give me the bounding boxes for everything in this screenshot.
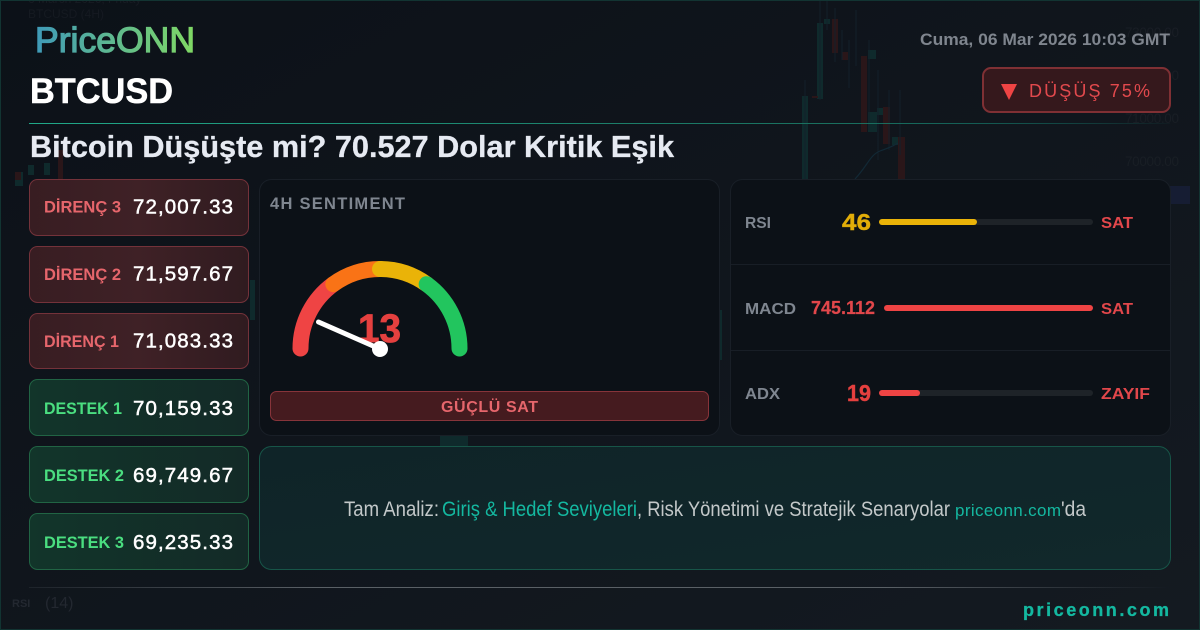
- call to action text: , Risk Yönetimi ve Stratejik Senaryolar: [637, 498, 950, 521]
- level: resistance 2: [30, 246, 248, 302]
- level: resistance 1: [30, 314, 248, 368]
- level: support 1: 70,159.33: [133, 397, 233, 420]
- indicator: ADX: ADX: [745, 386, 780, 403]
- trend badge: [983, 68, 1170, 112]
- panel: indicators: [730, 180, 1170, 436]
- symbol heading: BTCUSD: [30, 72, 173, 111]
- level: resistance 3: [30, 180, 248, 236]
- indicator: RSI: 46: [842, 209, 871, 235]
- date: Cuma, 06 Mar 2026 10:03 GMT: [920, 31, 1170, 49]
- level: resistance 2: 71,597.67: [133, 262, 233, 286]
- indicator: MACD: SAT: [1101, 301, 1133, 318]
- footer rule: [29, 587, 1170, 588]
- faded candlestick chart background: 72000.00: [1125, 68, 1179, 83]
- level: resistance 3: DİRENÇ 3: [44, 198, 121, 216]
- level: support 2: 69,749.67: [133, 464, 233, 487]
- level: support 1: DESTEK 1: [44, 400, 122, 418]
- call to action text: 'da: [1061, 498, 1086, 521]
- faded candlestick chart background: RSI: [12, 598, 30, 610]
- indicator: MACD: 745.112: [811, 298, 875, 318]
- indicator: MACD: MACD: [745, 301, 796, 318]
- gauge needle: [318, 322, 388, 357]
- faded candlestick chart background: 70000.00: [1125, 154, 1179, 169]
- level: support 3: DESTEK 3: [44, 534, 124, 552]
- call to action text: [344, 498, 1086, 521]
- call to action text: Tam Analiz:: [344, 498, 439, 521]
- verdict bar: [270, 392, 708, 420]
- logo: PriceONN: [35, 21, 195, 60]
- faded candlestick chart background: (14): [45, 595, 73, 612]
- call to action text: priceonn.com: [955, 501, 1061, 520]
- level: resistance 1: 71,083.33: [133, 330, 233, 352]
- icon: down triangle: [1001, 84, 1017, 100]
- indicator: ADX: ZAYIF: [1101, 386, 1150, 403]
- level: resistance 2: DİRENÇ 2: [44, 266, 121, 284]
- faded candlestick chart background: BTCUSD (4H): [28, 7, 104, 21]
- sentiment heading: 4H SENTIMENT: [270, 195, 405, 213]
- level: support 2: DESTEK 2: [44, 467, 124, 485]
- indicator: RSI: RSI: [745, 215, 771, 232]
- panel: 4H sentiment: [260, 180, 720, 436]
- level: support 3: 69,235.33: [133, 531, 233, 554]
- headline: Bitcoin Düşüşte mi? 70.527 Dolar Kritik Eşik: [30, 130, 674, 164]
- level: support 1: [30, 380, 248, 436]
- faded candlestick chart background: 71000.00: [1125, 111, 1179, 126]
- call to action text: Giriş & Hedef Seviyeleri: [442, 498, 637, 521]
- indicator: ADX: [745, 380, 1150, 406]
- footer site link: priceonn.com: [1023, 600, 1169, 620]
- indicator: RSI: [745, 209, 1133, 235]
- indicator: RSI: SAT: [1101, 215, 1133, 232]
- gauge: [300, 269, 460, 348]
- verdict bar: GÜÇLÜ SAT: [441, 397, 538, 416]
- level: resistance 1: DİRENÇ 1: [44, 333, 119, 351]
- gauge value: 13: [358, 307, 401, 351]
- level: support 3: [30, 514, 248, 570]
- indicator: MACD: [745, 298, 1133, 318]
- level: support 2: [30, 446, 248, 502]
- faded candlestick chart background: 73000.00: [1125, 25, 1179, 40]
- header rule: [29, 123, 1170, 124]
- level: resistance 3: 72,007.33: [133, 196, 233, 218]
- indicator: ADX: 19: [847, 380, 871, 406]
- panel: call to action: [260, 446, 1170, 570]
- badge text: DÜŞÜŞ 75%: [1029, 81, 1150, 101]
